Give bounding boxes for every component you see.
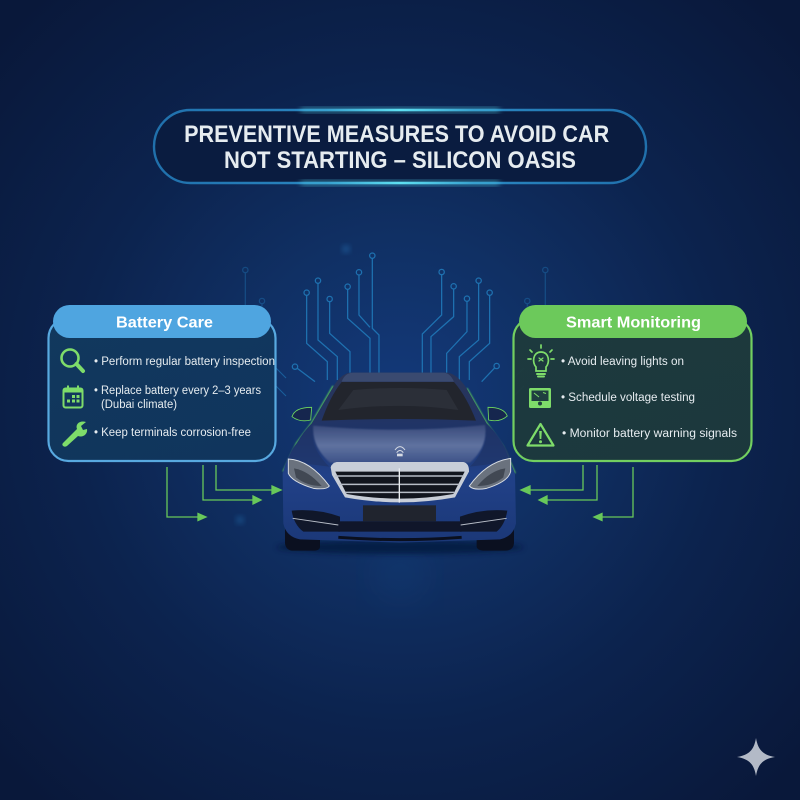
circuit traces (243, 253, 548, 396)
icon: warning triangle (528, 424, 554, 446)
hood side shading (288, 424, 512, 467)
bullet: replace battery: (Dubai climate) (101, 399, 177, 411)
bullet: replace battery: • Replace battery every 2–3 years (94, 385, 261, 397)
lower grille (338, 521, 462, 532)
grille (331, 462, 469, 502)
icon: magnifier (62, 350, 83, 371)
panel: battery care (48, 305, 276, 461)
title text: PREVENTIVE MEASURES TO AVOID CAR (184, 121, 609, 148)
arrows: left side (167, 465, 281, 520)
battery care header: Battery Care (116, 314, 213, 332)
battery care header (53, 305, 271, 338)
car body (283, 373, 516, 543)
license plate (363, 505, 436, 521)
bullet: voltage: • Schedule voltage testing (561, 392, 695, 404)
sparkle watermark (737, 738, 775, 776)
icon: calendar (64, 386, 82, 408)
icon: wrench (62, 421, 87, 447)
windshield (322, 382, 476, 421)
chrome strips (293, 518, 507, 525)
glow dots (236, 245, 422, 597)
bullet: inspection: • Perform regular battery inspection (94, 356, 275, 368)
hood (313, 425, 485, 463)
arrows: right side (521, 465, 633, 520)
title text: NOT STARTING – SILICON OASIS (224, 147, 576, 174)
car ground shadow (277, 541, 523, 554)
headlights (288, 459, 329, 489)
panel: smart monitoring (514, 305, 752, 461)
car green glow (283, 386, 515, 473)
lower air intakes (292, 510, 507, 532)
title banner (154, 108, 646, 186)
wheels (285, 527, 514, 551)
bullet: lights: • Avoid leaving lights on (561, 356, 684, 368)
mirrors (292, 407, 312, 421)
bottom lip (338, 537, 462, 540)
smart monitoring header: Smart Monitoring (566, 314, 701, 332)
bullet: warning signals: • Monitor battery warning signals (562, 428, 737, 440)
roof (342, 373, 454, 382)
emblem (395, 447, 405, 456)
bullet: terminals: • Keep terminals corrosion-free (94, 427, 251, 439)
icon: light bulb (528, 345, 554, 376)
smart monitoring header (519, 305, 747, 338)
car (277, 373, 523, 554)
icon: voltmeter (529, 388, 551, 408)
